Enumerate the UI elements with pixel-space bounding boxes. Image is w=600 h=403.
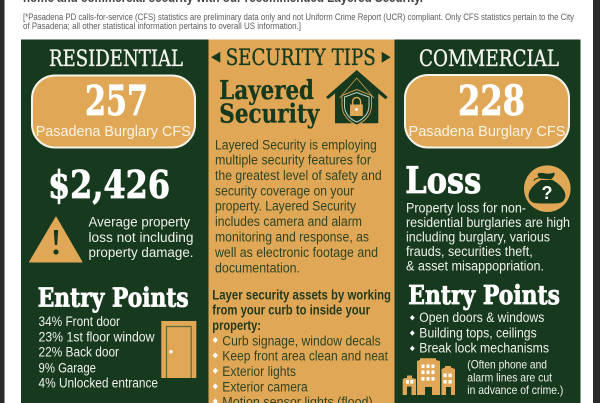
text: layered security definition: documentation. [215,260,300,275]
icon: house with shield and lock [326,70,388,125]
text: layered security definition: property. Layered Security [215,199,356,214]
list: commercial entry points: Building tops, ceilings [419,325,537,340]
list: commercial entry points: Open doors & windows [419,310,545,325]
stat box: commercial burglary count: 228 [458,77,525,125]
list: commercial entry points: Break lock mechanisms [419,341,549,356]
text: layered security definition: includes camera and alarm [215,214,362,229]
text: layered security definition: multiple security features for [215,153,371,168]
heading: entry points: Entry Points [408,281,560,311]
list: residential entry points: 23% 1st floor window [38,329,155,344]
text: layer security assets intro: property: [212,318,261,333]
list: security assets: Curb signage, window decals [222,333,381,348]
text: property loss description: Average property [88,215,190,230]
text: property loss description: frauds, securities theft, [406,244,533,259]
text: layered security definition: security coverage on your [215,183,354,198]
text: phone and alarm note: in advance of crime.) [467,383,563,397]
list: security assets: Exterior camera [222,380,308,395]
heading: layered security [219,76,320,129]
list: security assets [213,333,388,403]
heading: layered security: Layered [219,76,314,106]
text: property loss description: residential burglaries are high [406,215,570,230]
stat box: residential burglary count [32,76,195,148]
heading: commercial: COMMERCIAL [419,47,559,72]
text: layer security assets intro: from your curb to inside your [212,303,371,318]
text: property loss description: loss not including [88,230,194,245]
arrow: right [382,52,391,63]
stat box: commercial burglary count [405,75,569,148]
text: property loss description: property damage. [88,245,194,260]
text: property loss description [406,201,570,274]
list: security assets: Keep front area clean and neat [222,349,388,364]
text: layered security definition: monitoring and response, as [215,230,369,245]
panel: security tips [208,40,394,403]
icon: office buildings [403,358,455,395]
text: phone and alarm note [467,358,563,397]
heading: layered security: Security [219,99,320,129]
text: layered security definition: well as electronic footage and [214,245,378,260]
text: layered security definition: Layered Security is employing [215,137,377,152]
text: layer security assets intro [212,287,391,333]
text: property loss description: Property loss for non- [406,201,526,216]
footnote: of Pasadena; all other statistical information pertains to overall US information.] [23,21,301,32]
stat: average property loss: $2,426 [48,162,170,207]
arrow: left [211,52,220,63]
list: residential entry points: 9% Garage [38,360,96,375]
stat box: residential burglary count: 257 [85,77,148,125]
heading: residential: RESIDENTIAL [49,47,183,72]
icon: warning triangle [30,217,82,262]
heading: loss: Loss [405,160,481,202]
list: commercial entry points [410,310,549,356]
text: phone and alarm note: alarm lines are cut [467,370,553,384]
stat box: residential burglary count: Pasadena Burglary CFS [36,123,191,140]
text: property loss description: & asset misappopriation. [406,259,544,274]
list: residential entry points: 4% Unlocked entrance [38,376,158,391]
text: property loss description: including burglary, various [406,230,550,245]
text: layered security definition [214,137,382,275]
stat box: commercial burglary count: Pasadena Burglary CFS [408,123,566,140]
text: layered security definition: the greatest level of safety and [215,168,382,183]
icon: money bag with question mark: ? [542,183,552,203]
panel: commercial [394,40,580,403]
footnote [23,12,574,32]
list: residential entry points: 22% Back door [38,345,119,360]
icon: money bag with question mark [524,165,571,212]
text: property loss description [88,215,194,260]
icon: door [161,321,196,378]
heading: security tips: SECURITY TIPS [226,46,376,71]
panel: residential [21,40,209,403]
list: residential entry points [38,314,158,391]
text: phone and alarm note: (Often phone and [467,358,547,372]
list: security assets: Exterior lights [222,364,296,379]
list: residential entry points: 34% Front door [38,314,120,329]
text: layer security assets intro: Layer security assets by working [212,287,391,302]
heading: entry points: Entry Points [38,284,189,314]
